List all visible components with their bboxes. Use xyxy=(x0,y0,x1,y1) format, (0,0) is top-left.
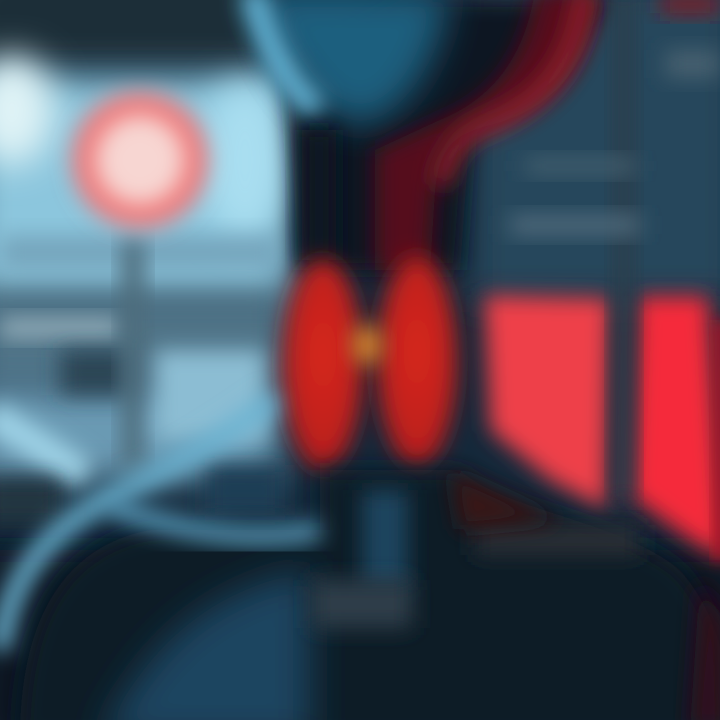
icon: red circle sign xyxy=(72,92,208,228)
right side faded text lines xyxy=(510,50,720,235)
neck silhouette xyxy=(252,0,610,270)
left lobe xyxy=(283,259,363,471)
isthmus xyxy=(352,325,382,365)
right lobe xyxy=(377,256,457,468)
left panel details xyxy=(0,235,285,525)
right side red panels xyxy=(484,0,720,560)
blue outline curve xyxy=(0,400,320,650)
red artery xyxy=(375,0,720,270)
thyroid gland xyxy=(283,256,457,471)
lower neck and body xyxy=(20,470,720,720)
background xyxy=(0,0,720,546)
